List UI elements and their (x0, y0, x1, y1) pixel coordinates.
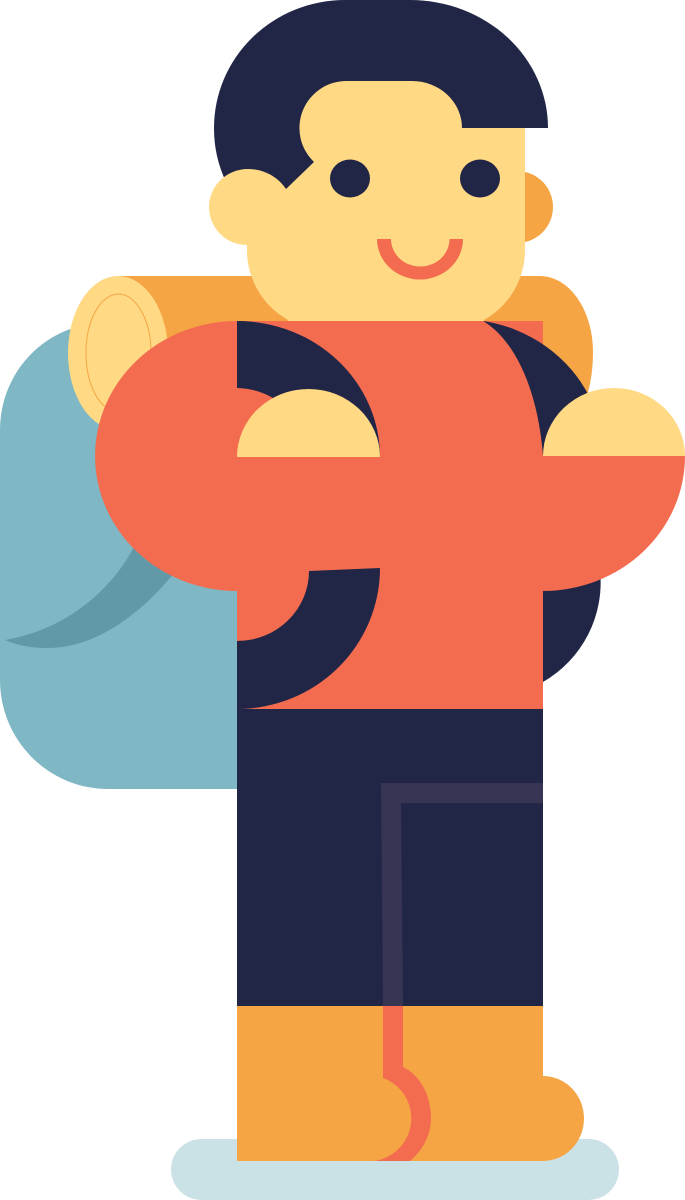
left shoulder and arm (95, 321, 380, 591)
right forearm (543, 456, 685, 591)
backpack body (0, 323, 239, 789)
right ear (481, 171, 553, 243)
left eye (330, 160, 370, 198)
back arm shadow lower right (543, 570, 601, 682)
trouser seam (381, 783, 543, 1006)
boots (237, 1006, 584, 1161)
lower left arm shadow (237, 568, 380, 709)
sleeping roll inner ring (86, 294, 151, 412)
sleeping roll (118, 276, 593, 420)
torso (237, 321, 543, 709)
left sleeve fold (237, 388, 273, 457)
left sleeve shadow upper (237, 321, 380, 457)
backpack shaded crescent (5, 545, 175, 648)
hair (214, 0, 548, 215)
right sleeve shadow (483, 321, 590, 456)
left hand (237, 389, 380, 457)
trousers (237, 709, 543, 1006)
left ear (209, 169, 286, 245)
boot seam (374, 1006, 431, 1161)
torso and arms (95, 321, 685, 709)
sleeping roll end (68, 276, 168, 430)
boots body (237, 1006, 584, 1161)
smile (377, 239, 463, 280)
trousers body (237, 709, 543, 1006)
right eye (460, 160, 500, 198)
ground shadow (171, 1139, 619, 1200)
face (247, 81, 525, 325)
right hand (543, 388, 685, 456)
backpack (0, 276, 593, 789)
head (209, 0, 553, 325)
